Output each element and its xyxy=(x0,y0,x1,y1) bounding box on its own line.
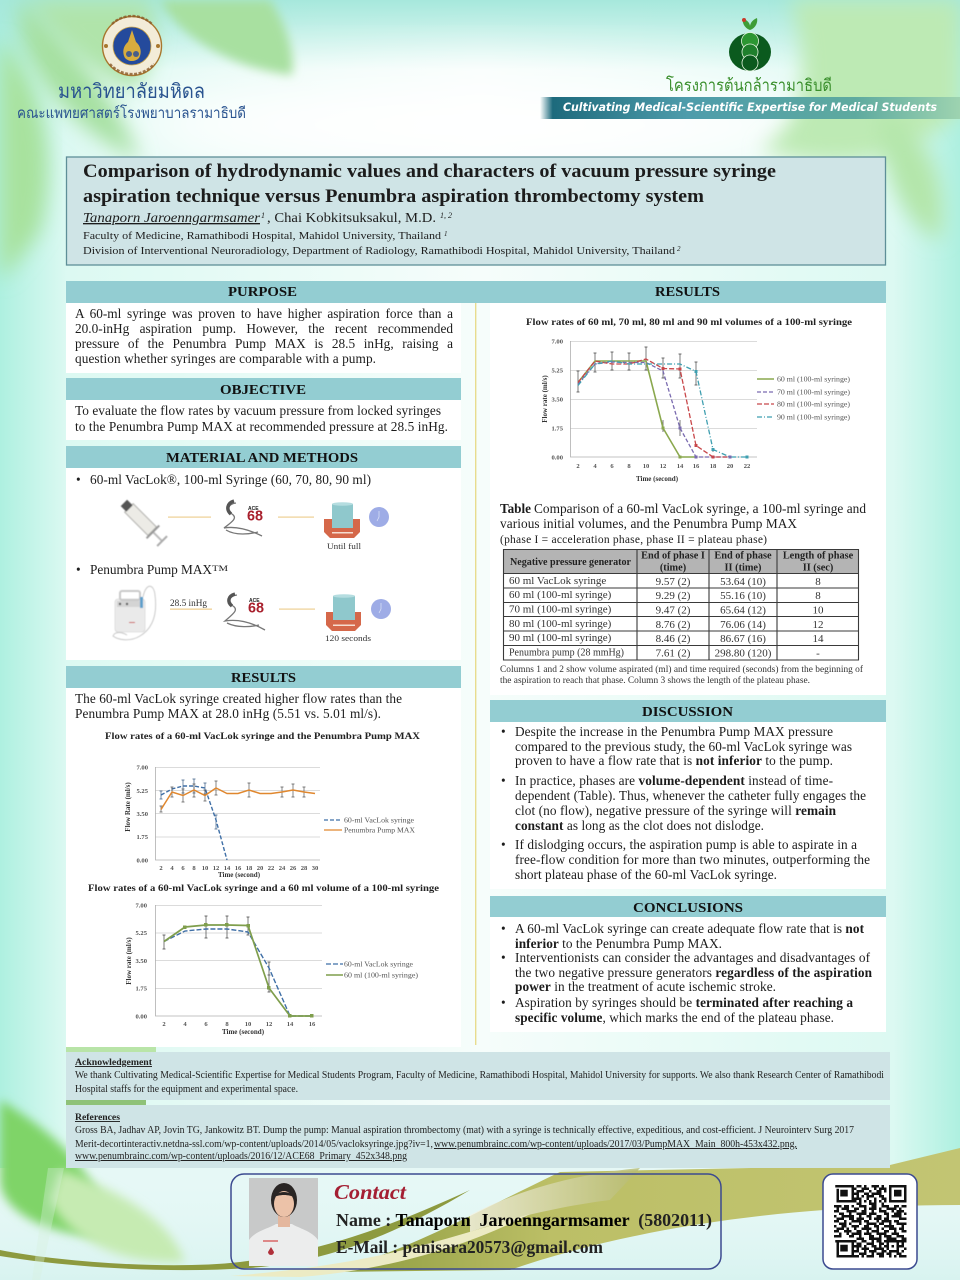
references panel xyxy=(66,1105,890,1168)
icon: aspiration pump xyxy=(113,586,156,640)
chart: VacLok vs pump: 7.00 xyxy=(136,764,149,772)
chart: VacLok vs pump xyxy=(105,731,420,879)
discussion text: constant as long as the clot does not dislodge. xyxy=(515,818,764,833)
chart: VacLok vs pump: Flow Rate (ml/s) xyxy=(124,782,132,832)
conclusions text xyxy=(501,921,873,1025)
objective text xyxy=(75,403,448,434)
contact email: E-Mail : panisara20573@gmail.com xyxy=(336,1237,603,1257)
column divider xyxy=(475,303,476,1045)
table rows: 55.16 (10) xyxy=(720,590,766,602)
legend: 60-ml VacLok syringe xyxy=(344,816,415,824)
acknowledgement panel: We thank Cultivating Medical-Scientific Expertise for Medical Students Program, Faculty of Medicine, Ramathibodi Hospital, Mahidol University for supports. We also thank Research Center of Ramathibodi xyxy=(75,1070,884,1081)
legend xyxy=(324,816,416,834)
conclusions header xyxy=(490,896,886,917)
legend: 90 ml (100-ml syringe) xyxy=(777,412,851,422)
results text left: The 60-ml VacLok syringe created higher flow rates than the xyxy=(75,691,402,706)
chart: VacLok vs 60 ml of 100-ml syringe: 12 xyxy=(266,1021,273,1028)
material bullet 1: • xyxy=(76,472,81,487)
discussion text: dependent (Table). Thus, whenever the catheter fully engages the xyxy=(515,788,866,803)
chart: VacLok vs pump: 16 xyxy=(235,865,242,872)
chart: flow rates by volume: 20 xyxy=(727,463,734,470)
title: aspiration technique versus Penumbra aspiration thrombectomy system xyxy=(83,186,705,207)
discussion text: compared to the previous study, the 60-ml VacLok syringe was xyxy=(515,739,852,754)
QR code card xyxy=(823,1174,917,1269)
table header: Negative pressure generator xyxy=(510,557,631,568)
legend: 60 ml (100-ml syringe) xyxy=(777,374,851,384)
chart title: Flow rates of a 60-ml VacLok syringe and the Penumbra Pump MAX xyxy=(105,731,420,742)
table note: the aspiration to reach that phase. Column 3 shows the length of the plateau phase. xyxy=(500,675,810,686)
legend: 70 ml (100-ml syringe) xyxy=(777,388,851,396)
section header bar: purpose and results xyxy=(66,281,886,303)
affiliations xyxy=(83,230,681,257)
table rows: 10 xyxy=(812,604,824,616)
title panel xyxy=(66,157,886,265)
acknowledgement panel xyxy=(66,1052,890,1100)
table rows: 8.46 (2) xyxy=(656,633,691,645)
title xyxy=(83,161,776,207)
chart: VacLok vs 60 ml of 100-ml syringe xyxy=(88,883,440,1036)
icon: collection cup xyxy=(324,502,360,538)
programme name in Thai: โครงการต้นกล้ารามาธิบดี xyxy=(666,75,832,95)
logo: Mahidol University seal xyxy=(102,16,162,75)
chart: flow rates by volume: 4 xyxy=(593,463,597,470)
chart: flow rates by volume: 22 xyxy=(744,463,751,470)
chart: VacLok vs pump: 28 xyxy=(301,865,308,872)
chart: VacLok vs pump: 3.50 xyxy=(136,811,149,818)
chart: flow rates by volume: 10 xyxy=(643,463,650,470)
label: until full: Until full xyxy=(327,541,362,551)
icon: syringe xyxy=(118,497,169,548)
table caption: Table xyxy=(500,501,531,516)
chart: VacLok vs pump: 2 xyxy=(159,865,163,872)
chart: flow rates by volume: 16 xyxy=(693,463,700,470)
table caption xyxy=(500,501,866,546)
objective header: OBJECTIVE xyxy=(220,382,306,397)
objective header xyxy=(66,378,461,400)
table rows: 76.06 (14) xyxy=(720,619,766,631)
icon: ACE 68 catheter: ACE xyxy=(248,506,259,512)
references panel: www.penumbrainc.com/wp-content/uploads/2016/12/ACE68_Primary_452x348.png xyxy=(75,1151,407,1162)
chart: VacLok vs 60 ml of 100-ml syringe: 14 xyxy=(287,1021,294,1028)
chart: VacLok vs 60 ml of 100-ml syringe: 10 xyxy=(245,1021,252,1028)
purpose text: A 60-ml syringe was proven to have higher aspiration force than a xyxy=(75,306,453,320)
conclusions header: CONCLUSIONS xyxy=(633,900,743,915)
chart: VacLok vs pump: 22 xyxy=(268,865,275,872)
table rows: 8.76 (2) xyxy=(656,619,691,631)
table rows: 8 xyxy=(815,590,821,602)
chart: flow rates by volume: 14 xyxy=(677,463,684,470)
table header: II (sec) xyxy=(803,562,833,574)
table header: End of phase I xyxy=(641,550,705,562)
conclusions text: the two negative pressure generators regardless of the aspiration xyxy=(515,965,873,980)
chart: flow rates by volume: 6 xyxy=(610,463,614,470)
chart: VacLok vs pump: 30 xyxy=(312,865,319,872)
table rows: 86.67 (16) xyxy=(720,633,766,645)
table rows: 9.29 (2) xyxy=(656,590,691,602)
discussion text: In practice, phases are volume-dependent instead of time- xyxy=(515,773,833,788)
results text left xyxy=(75,691,402,721)
legend: 60 ml (100-ml syringe) xyxy=(344,970,419,980)
contact card xyxy=(231,1174,721,1269)
title: Comparison of hydrodynamic values and characters of vacuum pressure syringe xyxy=(83,161,776,182)
discussion text xyxy=(501,724,870,882)
table caption: (phase I = acceleration phase, phase II = plateau phase) xyxy=(500,534,767,546)
white column panels xyxy=(66,303,886,1047)
chart: flow rates by volume: 5.25 xyxy=(551,368,564,374)
chart: VacLok vs pump: 18 xyxy=(246,865,253,872)
discussion text: short plateau phase of the 60-ml VacLok syringe. xyxy=(515,867,777,882)
table rows: 8 xyxy=(815,576,821,588)
discussion header xyxy=(490,700,886,722)
icon: ACE 68 catheter: ACE xyxy=(249,598,260,604)
chart: flow rates by volume: 1.75 xyxy=(551,426,564,432)
diagram: syringe setup xyxy=(118,497,389,551)
chart: VacLok vs pump: 10 xyxy=(202,865,209,872)
chart: VacLok vs pump: 24 xyxy=(279,865,286,872)
table rows: Penumbra pump (28 mmHg) xyxy=(509,646,624,658)
discussion text: free-flow condition for more than two minutes, outperforming the xyxy=(515,852,870,867)
affiliations: Faculty of Medicine, Ramathibodi Hospital, Mahidol University, Thailand xyxy=(83,230,442,242)
chart: VacLok vs pump: 4 xyxy=(170,865,174,872)
chart: flow rates by volume xyxy=(526,317,853,483)
conclusions text: power in the treatment of acute ischemic stroke. xyxy=(515,979,776,994)
chart: VacLok vs pump: 12 xyxy=(213,865,220,872)
authors xyxy=(83,210,452,225)
chart: VacLok vs pump: 20 xyxy=(257,865,264,872)
references panel: Gross BA, Jadhav AP, Jovin TG, Jankowitz BT. Dump the pump: Manual aspiration thrombectomy (mat) with a syringe is technically effective, expeditious, and cost-efficient. J Neurointerv Surg 2017 xyxy=(75,1125,854,1136)
table rows: 60 ml VacLok syringe xyxy=(509,575,606,587)
affiliations: 1 xyxy=(444,230,448,238)
table header: End of phase xyxy=(714,550,772,562)
icon: ACE 68 catheter xyxy=(224,501,263,536)
table rows: 14 xyxy=(812,633,824,645)
purpose text: pressure of the Penumbra Pump MAX is 28.5 inHg, raising a xyxy=(75,336,453,351)
chart: VacLok vs pump: 0.00 xyxy=(136,858,149,864)
chart: flow rates by volume: 18 xyxy=(710,463,717,470)
chart: flow rates by volume: 8 xyxy=(627,463,631,470)
programme banner xyxy=(540,97,960,119)
references panel: References xyxy=(75,1113,120,1123)
chart: flow rates by volume: Time (second) xyxy=(636,475,679,483)
chart: VacLok vs 60 ml of 100-ml syringe: 2 xyxy=(162,1021,166,1028)
results header left xyxy=(66,666,461,688)
chart: VacLok vs pump: 26 xyxy=(290,865,297,872)
objective text: To evaluate the flow rates by vacuum pressure from locked syringes xyxy=(75,403,441,418)
chart: flow rates by volume: 3.50 xyxy=(551,396,564,404)
table rows: 7.61 (2) xyxy=(656,648,691,660)
conclusions text: specific volume, which marks the end of the plateau phase. xyxy=(515,1010,834,1025)
authors: 1, 2 xyxy=(440,211,452,220)
affiliations: Division of Interventional Neuroradiology, Department of Radiology, Ramathibodi Hospital, Mahidol University, Thailand xyxy=(83,245,676,257)
legend: Penumbra Pump MAX xyxy=(344,826,416,834)
university name in Thai: มหาวิทยาลัยมหิดล xyxy=(58,81,205,103)
purpose text: question whether syringes are comparable with a pump. xyxy=(75,351,376,366)
material bullet 1: 60-ml VacLok®, 100-ml Syringe (60, 70, 80, 90 ml) xyxy=(90,472,371,487)
references panel: Merit-decortinteractiv.netdna-ssl.com/wp-content/uploads/2014/05/vacloksyringe.jpg?iv=1, xyxy=(75,1139,433,1150)
university name in Thai xyxy=(17,81,246,122)
legend: 60-ml VacLok syringe xyxy=(344,960,414,968)
objective text: to the Penumbra Pump MAX at recommended pressure at 28.5 inHg. xyxy=(75,419,448,434)
table rows: 70 ml (100-ml syringe) xyxy=(509,604,612,616)
icon: clock xyxy=(371,599,391,619)
university name in Thai: คณะแพทยศาสตร์โรงพยาบาลรามาธิบดี xyxy=(17,104,246,122)
table rows: 65.64 (12) xyxy=(720,604,766,616)
discussion text: If dislodging occurs, the aspiration pump is able to aspirate in a xyxy=(515,837,857,852)
table rows: 80 ml (100-ml syringe) xyxy=(509,618,612,630)
discussion header: DISCUSSION xyxy=(642,704,733,719)
chart: VacLok vs 60 ml of 100-ml syringe: 16 xyxy=(309,1021,316,1028)
icon: clock xyxy=(369,507,389,527)
legend xyxy=(757,374,851,422)
table rows: 12 xyxy=(812,619,824,631)
chart: VacLok vs pump: 6 xyxy=(181,865,185,872)
conclusions text: Aspiration by syringes should be terminated after reaching a xyxy=(515,995,853,1010)
chart: flow rates by volume: 0.00 xyxy=(551,454,564,462)
chart: VacLok vs 60 ml of 100-ml syringe: 1.75 xyxy=(135,986,148,992)
chart: VacLok vs 60 ml of 100-ml syringe: 5.25 xyxy=(135,930,148,937)
table rows: 90 ml (100-ml syringe) xyxy=(509,632,612,644)
table rows: 9.57 (2) xyxy=(656,576,691,588)
chart: VacLok vs 60 ml of 100-ml syringe: 3.50 xyxy=(135,958,148,965)
table rows: 298.80 (120) xyxy=(715,648,772,660)
legend xyxy=(326,960,419,980)
acknowledgement panel: Hospital staffs for the equipment and experimental space. xyxy=(75,1084,298,1095)
chart: flow rates by volume: 7.00 xyxy=(551,338,564,346)
chart: VacLok vs pump: Time (second) xyxy=(218,871,261,879)
acknowledgement panel: Acknowledgement xyxy=(75,1058,153,1068)
conclusions text: Interventionists can consider the advantages and disadvantages of xyxy=(515,950,871,965)
chart title: Flow rates of a 60-ml VacLok syringe and a 60 ml volume of a 100-ml syringe xyxy=(88,883,440,894)
table rows: 9.47 (2) xyxy=(656,604,691,616)
section header bar: purpose and results: RESULTS xyxy=(655,284,720,299)
chart: VacLok vs 60 ml of 100-ml syringe: 7.00 xyxy=(135,902,148,910)
programme banner: Cultivating Medical-Scientific Expertise for Medical Students xyxy=(563,100,937,114)
table rows: 60 ml (100-ml syringe) xyxy=(509,589,612,601)
chart: VacLok vs pump: 14 xyxy=(224,865,231,872)
material bullet 2: • xyxy=(76,562,81,577)
table note xyxy=(500,664,864,686)
results text left: Penumbra Pump MAX at 28.0 inHg (5.51 vs. 5.01 ml/s). xyxy=(75,706,381,721)
authors: , Chai Kobkitsuksakul, M.D. xyxy=(267,210,436,225)
diagram: pump setup xyxy=(113,586,391,643)
purpose text: 20.0-inHg aspiration pump. However, the recent recommended xyxy=(75,320,453,336)
chart: flow rates by volume: 2 xyxy=(576,463,580,470)
conclusions text: inferior to the Penumbra Pump MAX. xyxy=(515,936,722,951)
table caption: Comparison of a 60-ml VacLok syringe, a 100-ml syringe and xyxy=(534,501,866,516)
references panel: www.penumbrainc.com/wp-content/uploads/2017/03/PumpMAX_Main_800h-453x432.png, xyxy=(434,1139,797,1150)
material bullet 2: Penumbra Pump MAX xyxy=(90,562,212,577)
photo xyxy=(249,1178,318,1266)
heading: contact: Contact xyxy=(334,1180,407,1204)
chart: VacLok vs pump: 8 xyxy=(192,865,196,872)
table header: II (time) xyxy=(725,562,761,574)
chart: VacLok vs 60 ml of 100-ml syringe: 8 xyxy=(225,1021,229,1028)
conclusions text: • xyxy=(501,995,506,1010)
table note: Columns 1 and 2 show volume aspirated (ml) and time required (seconds) from the beginning of xyxy=(500,664,864,675)
table rows xyxy=(509,575,824,660)
icon: ACE 68 catheter: 68 xyxy=(247,508,263,524)
table rows: 53.64 (10) xyxy=(720,576,766,588)
table header: Length of phase xyxy=(783,550,854,562)
chart title: Flow rates of 60 ml, 70 ml, 80 ml and 90 ml volumes of a 100-ml syringe xyxy=(526,317,853,328)
section header bar: purpose and results: PURPOSE xyxy=(228,284,297,299)
discussion text: proven to have a flow rate that is not inferior to the pump. xyxy=(515,753,833,768)
discussion text: Despite the increase in the Penumbra Pump MAX pressure xyxy=(515,724,833,739)
material and methods header xyxy=(66,446,461,468)
chart: flow rates by volume: Flow rate (ml/s) xyxy=(541,375,549,423)
authors: Tanaporn Jaroenngarmsamer xyxy=(83,210,261,225)
icon: ACE 68 catheter: 68 xyxy=(248,600,264,616)
chart: VacLok vs pump: 5.25 xyxy=(136,788,149,795)
icon: ACE 68 catheter xyxy=(225,594,265,630)
conclusions text: A 60-ml VacLok syringe can create adequate flow rate that is not xyxy=(515,921,865,936)
chart: VacLok vs 60 ml of 100-ml syringe: 0.00 xyxy=(135,1014,148,1020)
conclusions text: • xyxy=(501,921,506,936)
chart: VacLok vs 60 ml of 100-ml syringe: Time (second) xyxy=(222,1028,265,1036)
label: 120 seconds: 120 seconds xyxy=(325,633,372,643)
table header: (time) xyxy=(660,562,686,574)
icon: collection cup xyxy=(326,594,361,631)
chart: VacLok vs 60 ml of 100-ml syringe: 6 xyxy=(204,1021,208,1028)
chart: VacLok vs 60 ml of 100-ml syringe: Flow rate (ml/s) xyxy=(125,937,133,985)
legend: 80 ml (100-ml syringe) xyxy=(777,400,851,408)
table rows: - xyxy=(816,648,820,660)
discussion text: • xyxy=(501,773,506,788)
contact name: Name : Tanaporn Jaroenngarmsamer (5802011) xyxy=(336,1210,712,1231)
logo: Cultivating programme xyxy=(729,18,771,71)
discussion text: • xyxy=(501,837,506,852)
chart: VacLok vs pump: 1.75 xyxy=(136,834,149,841)
table caption: various initial volumes, and the Penumbra Pump MAX xyxy=(500,516,797,531)
discussion text: • xyxy=(501,724,506,739)
conclusions text: • xyxy=(501,950,506,965)
chart: flow rates by volume: 12 xyxy=(660,463,667,470)
discussion text: clot (no flow), negative pressure of the syringe will remain xyxy=(515,803,837,818)
authors: 1 xyxy=(261,211,265,220)
material and methods header: MATERIAL AND METHODS xyxy=(166,450,358,465)
table header xyxy=(510,550,854,574)
results header left: RESULTS xyxy=(231,670,296,685)
material bullet 2: TM xyxy=(212,563,229,573)
chart: VacLok vs 60 ml of 100-ml syringe: 4 xyxy=(183,1021,187,1028)
olive band xyxy=(330,1148,960,1272)
table xyxy=(504,550,858,660)
affiliations: 2 xyxy=(677,245,681,253)
label: pressure: 28.5 inHg xyxy=(170,598,208,608)
purpose text xyxy=(75,306,453,366)
